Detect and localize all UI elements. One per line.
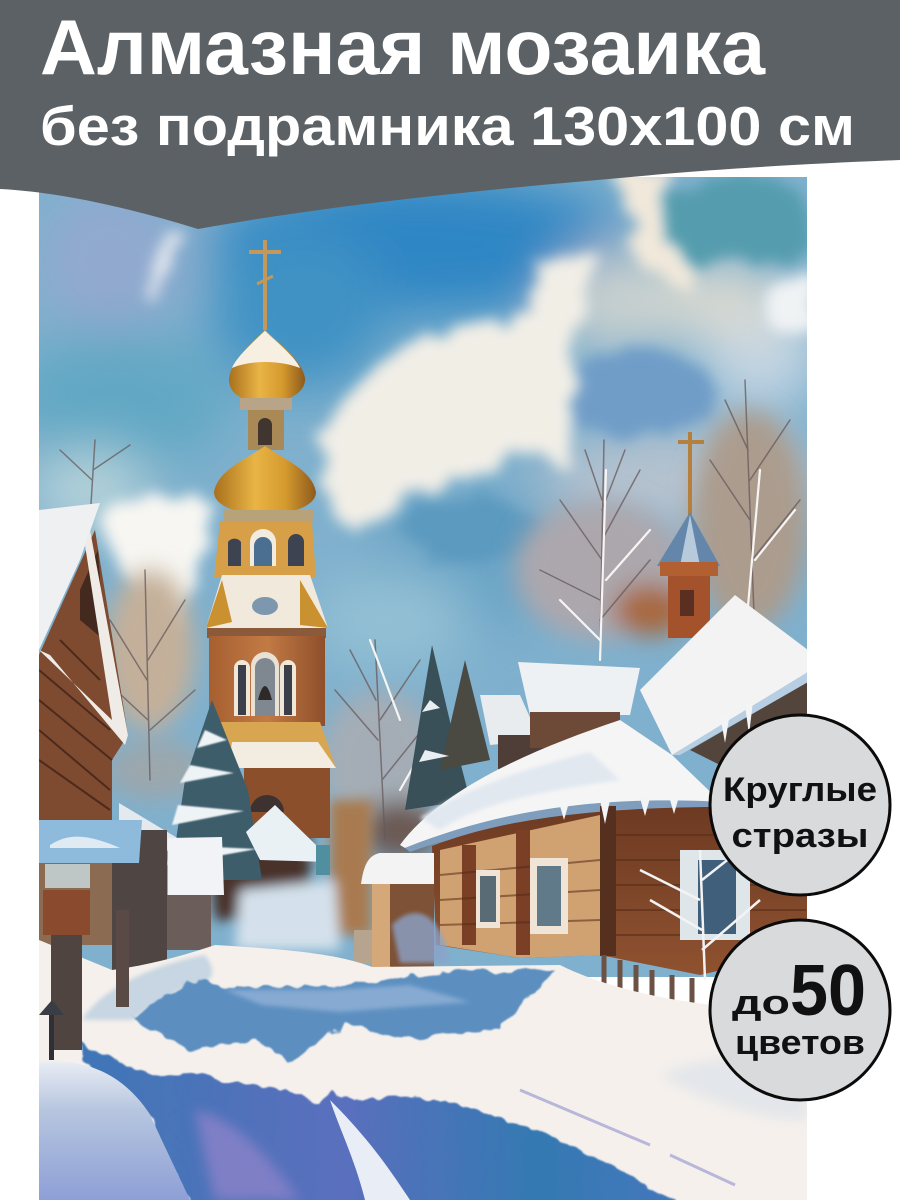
badge: round rhinestones: стразы: [732, 817, 868, 855]
distant right roofs: [480, 662, 640, 769]
fence and bare bush: [604, 955, 692, 1010]
left houses: [39, 503, 224, 973]
sky: [10, 170, 820, 977]
badge: up to 50 colours: до: [732, 984, 790, 1022]
upper wing: [640, 595, 808, 755]
white clouds: [108, 170, 815, 625]
badge: round rhinestones: Круглые: [723, 771, 877, 809]
cross: [249, 240, 281, 330]
icicles: [560, 701, 753, 824]
badge: up to 50 colours: [710, 920, 890, 1100]
badge: up to 50 colours: 50: [790, 951, 866, 1031]
lower left building: [39, 863, 112, 945]
windows: [476, 870, 500, 928]
painting: winter village with church: [10, 170, 820, 1200]
fir trees: [167, 645, 490, 880]
small shed: [354, 853, 450, 967]
blue awning: [39, 820, 142, 863]
background bare trees: [60, 380, 808, 860]
belfry: [207, 628, 326, 638]
snow ground: [39, 910, 807, 1200]
gold lower roof: [216, 722, 336, 768]
long snowy roof: [400, 720, 725, 848]
snow skirt: [206, 575, 328, 628]
left snowbank: [82, 955, 212, 1020]
bell tower: [206, 240, 336, 838]
badge: up to 50 colours: цветов: [735, 1024, 865, 1062]
snowy cottage near tower: [246, 805, 330, 875]
title: Алмазная мозаика: [40, 3, 766, 91]
subtitle: без подрамника 130х100 см: [40, 95, 855, 157]
road shadows: [132, 970, 555, 1063]
lower cupola: [214, 446, 316, 514]
posts and lantern: [51, 935, 82, 1050]
dark treeline behind cottages: [205, 800, 372, 950]
header banner: [0, 0, 900, 229]
right large house: [400, 595, 808, 1010]
octagon drum: [214, 522, 316, 578]
upper cupola: [229, 330, 305, 402]
badge: round rhinestones: [710, 715, 890, 895]
log wall: [432, 807, 808, 975]
teal cloud top right: [400, 174, 813, 564]
small chapel dome: [657, 432, 720, 638]
